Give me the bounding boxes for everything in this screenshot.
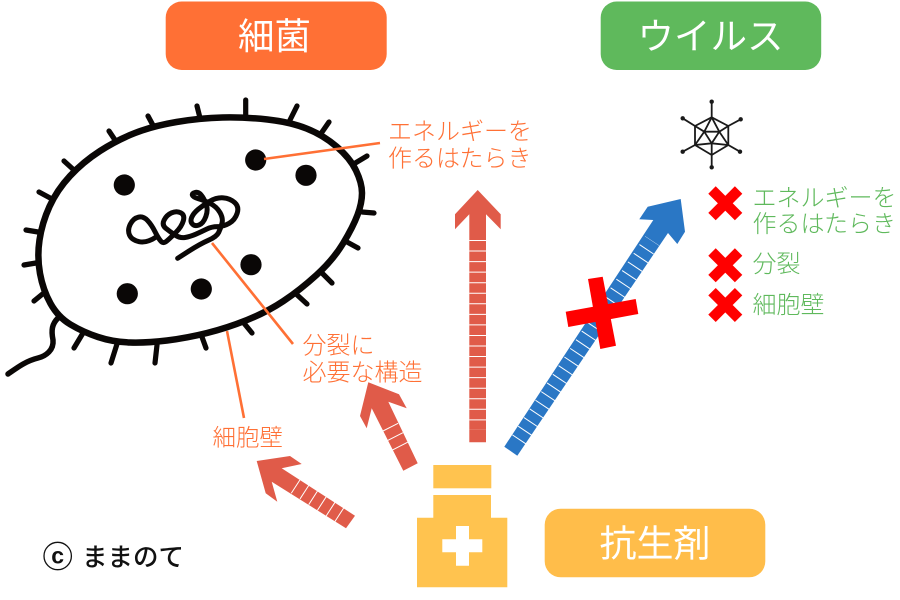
heading: bacteria: 細菌	[238, 16, 311, 57]
heading: antibiotics	[545, 509, 765, 577]
big red cross	[566, 277, 638, 349]
label: structures for division: 必要な構造	[302, 360, 422, 386]
illustration: bacterium	[8, 100, 374, 374]
label: structures for division	[302, 332, 422, 386]
label: virus has no energy production: 作るはたらき	[752, 211, 896, 238]
red x marks	[712, 190, 739, 318]
label: structures for division: 分裂に	[302, 332, 374, 360]
label: energy production (bacteria)	[388, 118, 532, 172]
bacterium spikes	[24, 100, 374, 363]
heading: bacteria	[166, 2, 387, 70]
heading: virus	[601, 2, 821, 70]
heading: virus: ウイルス	[638, 16, 784, 57]
arrow: antibiotic to virus (blocked)	[504, 199, 685, 456]
heading: antibiotics: 抗生剤	[600, 524, 710, 564]
leader lines	[212, 143, 380, 418]
DNA squiggle	[129, 192, 238, 258]
label: virus has no energy production	[752, 185, 896, 238]
bacterium cell wall	[38, 117, 362, 343]
credit	[44, 542, 184, 572]
label: energy production (bacteria): 作るはたらき	[388, 146, 532, 172]
label: energy production (bacteria): エネルギーを	[388, 118, 532, 146]
arrow: antibiotic to energy production	[455, 190, 501, 442]
arrow: antibiotic to division structure	[360, 382, 418, 471]
icon: antibiotic bottle	[417, 465, 507, 587]
arrow: antibiotic to cell wall	[257, 456, 355, 528]
label: virus has no cell wall: 細胞壁	[752, 292, 824, 319]
label: cell wall (bacteria): 細胞壁	[212, 424, 283, 450]
credit: c	[51, 542, 64, 568]
credit: ままのて	[82, 544, 184, 572]
icon: virus	[680, 100, 743, 170]
label: virus has no division: 分裂	[752, 251, 800, 278]
ribosomes	[114, 149, 317, 304]
bacterium flagellum	[8, 318, 58, 374]
label: virus has no energy production: エネルギーを	[752, 185, 896, 212]
